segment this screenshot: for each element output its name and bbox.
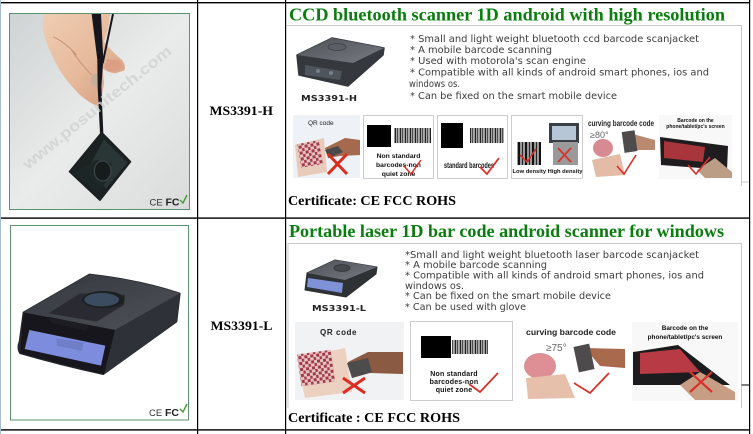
thumb: non standard barcodes <box>364 116 434 178</box>
thumbnails row: MS3391-H <box>293 115 732 179</box>
feature list: MS3391-L: * Can be used with glove <box>405 302 526 313</box>
feature list: MS3391-L: *Small and light weight bluetooth laser barcode scanjacket <box>405 250 699 261</box>
feature list: MS3391-H: * Used with motorola's scan engine <box>410 56 586 67</box>
thumb: QR code: QR code <box>320 328 357 337</box>
certification marks: CE <box>149 408 162 419</box>
feature list: MS3391-H: * A mobile barcode scanning <box>410 45 552 56</box>
model label: MS3391-L: MS3391-L <box>210 319 272 333</box>
hand <box>43 14 125 107</box>
thumb: barcode on phone screen: phone/tablet/pc's screen <box>666 124 725 130</box>
thumb: non standard barcodes: quiet zone <box>382 171 416 178</box>
feature list: MS3391-L: windows os. <box>405 281 464 292</box>
feature list: MS3391-H: * Small and light weight bluetooth ccd barcode scanjacket <box>410 34 699 45</box>
feature list: MS3391-H <box>409 34 709 102</box>
feature list: MS3391-H: * Compatible with all kinds of android smart phones, ios and <box>410 68 709 78</box>
certification marks: FC <box>166 196 180 208</box>
thumb: QR code <box>295 322 404 400</box>
thumb: QR code: QR code <box>308 120 334 127</box>
thumb: non standard barcodes: quiet zone <box>436 387 472 394</box>
certification marks: CE <box>150 198 163 208</box>
thumb: non standard barcodes: Non standard <box>377 153 420 160</box>
photo: MS3391-L scanner <box>10 226 188 420</box>
model label: MS3391-H: MS3391-H <box>210 104 273 118</box>
title: laser scanner: Portable laser 1D bar code android scanner for windows <box>289 221 724 241</box>
thumb: standard barcodes <box>438 116 508 178</box>
thumb: curving barcode 80 degrees: curving barcode code <box>588 119 654 128</box>
thumb: barcode on phone screen: Barcode on the <box>677 118 714 124</box>
thumbnails row: MS3391-L <box>295 322 738 401</box>
thumb: barcode on phone screen <box>659 115 732 179</box>
thumb: non standard barcodes: barcodes-non <box>430 379 478 386</box>
scanner device <box>18 274 180 374</box>
thumb: non standard barcodes: barcodes-non <box>376 162 421 169</box>
feature list: MS3391-H: * Can be fixed on the smart mobile device <box>410 91 617 102</box>
lanyard strap <box>92 14 113 133</box>
thumb: low and high density <box>512 116 582 178</box>
thumb: curving barcode 80 degrees <box>586 115 656 178</box>
thumb: non standard barcodes: Non standard <box>430 371 478 378</box>
panel: CCD product image frame <box>286 26 742 186</box>
thumb: barcode on phone screen: phone/tablet/pc's screen <box>648 334 722 341</box>
certificate line: MS3391-L: Certificate : CE FCC ROHS <box>288 411 460 426</box>
thumb: curving barcode 75 degrees <box>520 322 626 400</box>
thumb: QR code <box>293 115 360 178</box>
thumb: curving barcode 75 degrees: ≥75° <box>546 343 567 354</box>
product name: MS3391-L: MS3391-L <box>312 304 366 313</box>
product picture: MS3391-H <box>297 38 384 86</box>
certification marks <box>150 195 187 208</box>
thumb: curving barcode 80 degrees: ≥80° <box>590 130 609 140</box>
title: CCD scanner: CCD bluetooth scanner 1D android with high resolution <box>289 4 725 24</box>
panel: laser product image frame <box>288 244 742 408</box>
thumb: non standard barcodes <box>410 322 512 400</box>
feature list: MS3391-L: * Compatible with all kinds of android smart phones, ios and <box>405 270 704 282</box>
product picture: MS3391-L <box>305 260 377 297</box>
thumb: standard barcodes: standard barcodes <box>444 161 494 170</box>
scanner device <box>69 132 131 200</box>
feature list: MS3391-H: windows os. <box>409 79 460 90</box>
certificate line: MS3391-H: Certificate: CE FCC ROHS <box>288 194 456 209</box>
feature list: MS3391-L <box>405 250 704 313</box>
feature list: MS3391-L: * A mobile barcode scanning <box>405 260 547 271</box>
feature list: MS3391-L: * Can be fixed on the smart mobile device <box>405 291 611 302</box>
thumb: curving barcode 75 degrees: curving barcode code <box>526 328 617 337</box>
thumb: low and high density: Low density High density <box>512 169 582 175</box>
product name: MS3391-H: MS3391-H <box>301 94 357 103</box>
certification marks: FC <box>165 407 179 419</box>
photo: hand holding MS3391-H scanner <box>10 14 190 210</box>
thumb: barcode on phone screen <box>632 322 738 401</box>
watermark: www.posunitech.com <box>19 43 175 174</box>
certification marks <box>149 404 187 419</box>
thumb: barcode on phone screen: Barcode on the <box>662 325 709 332</box>
